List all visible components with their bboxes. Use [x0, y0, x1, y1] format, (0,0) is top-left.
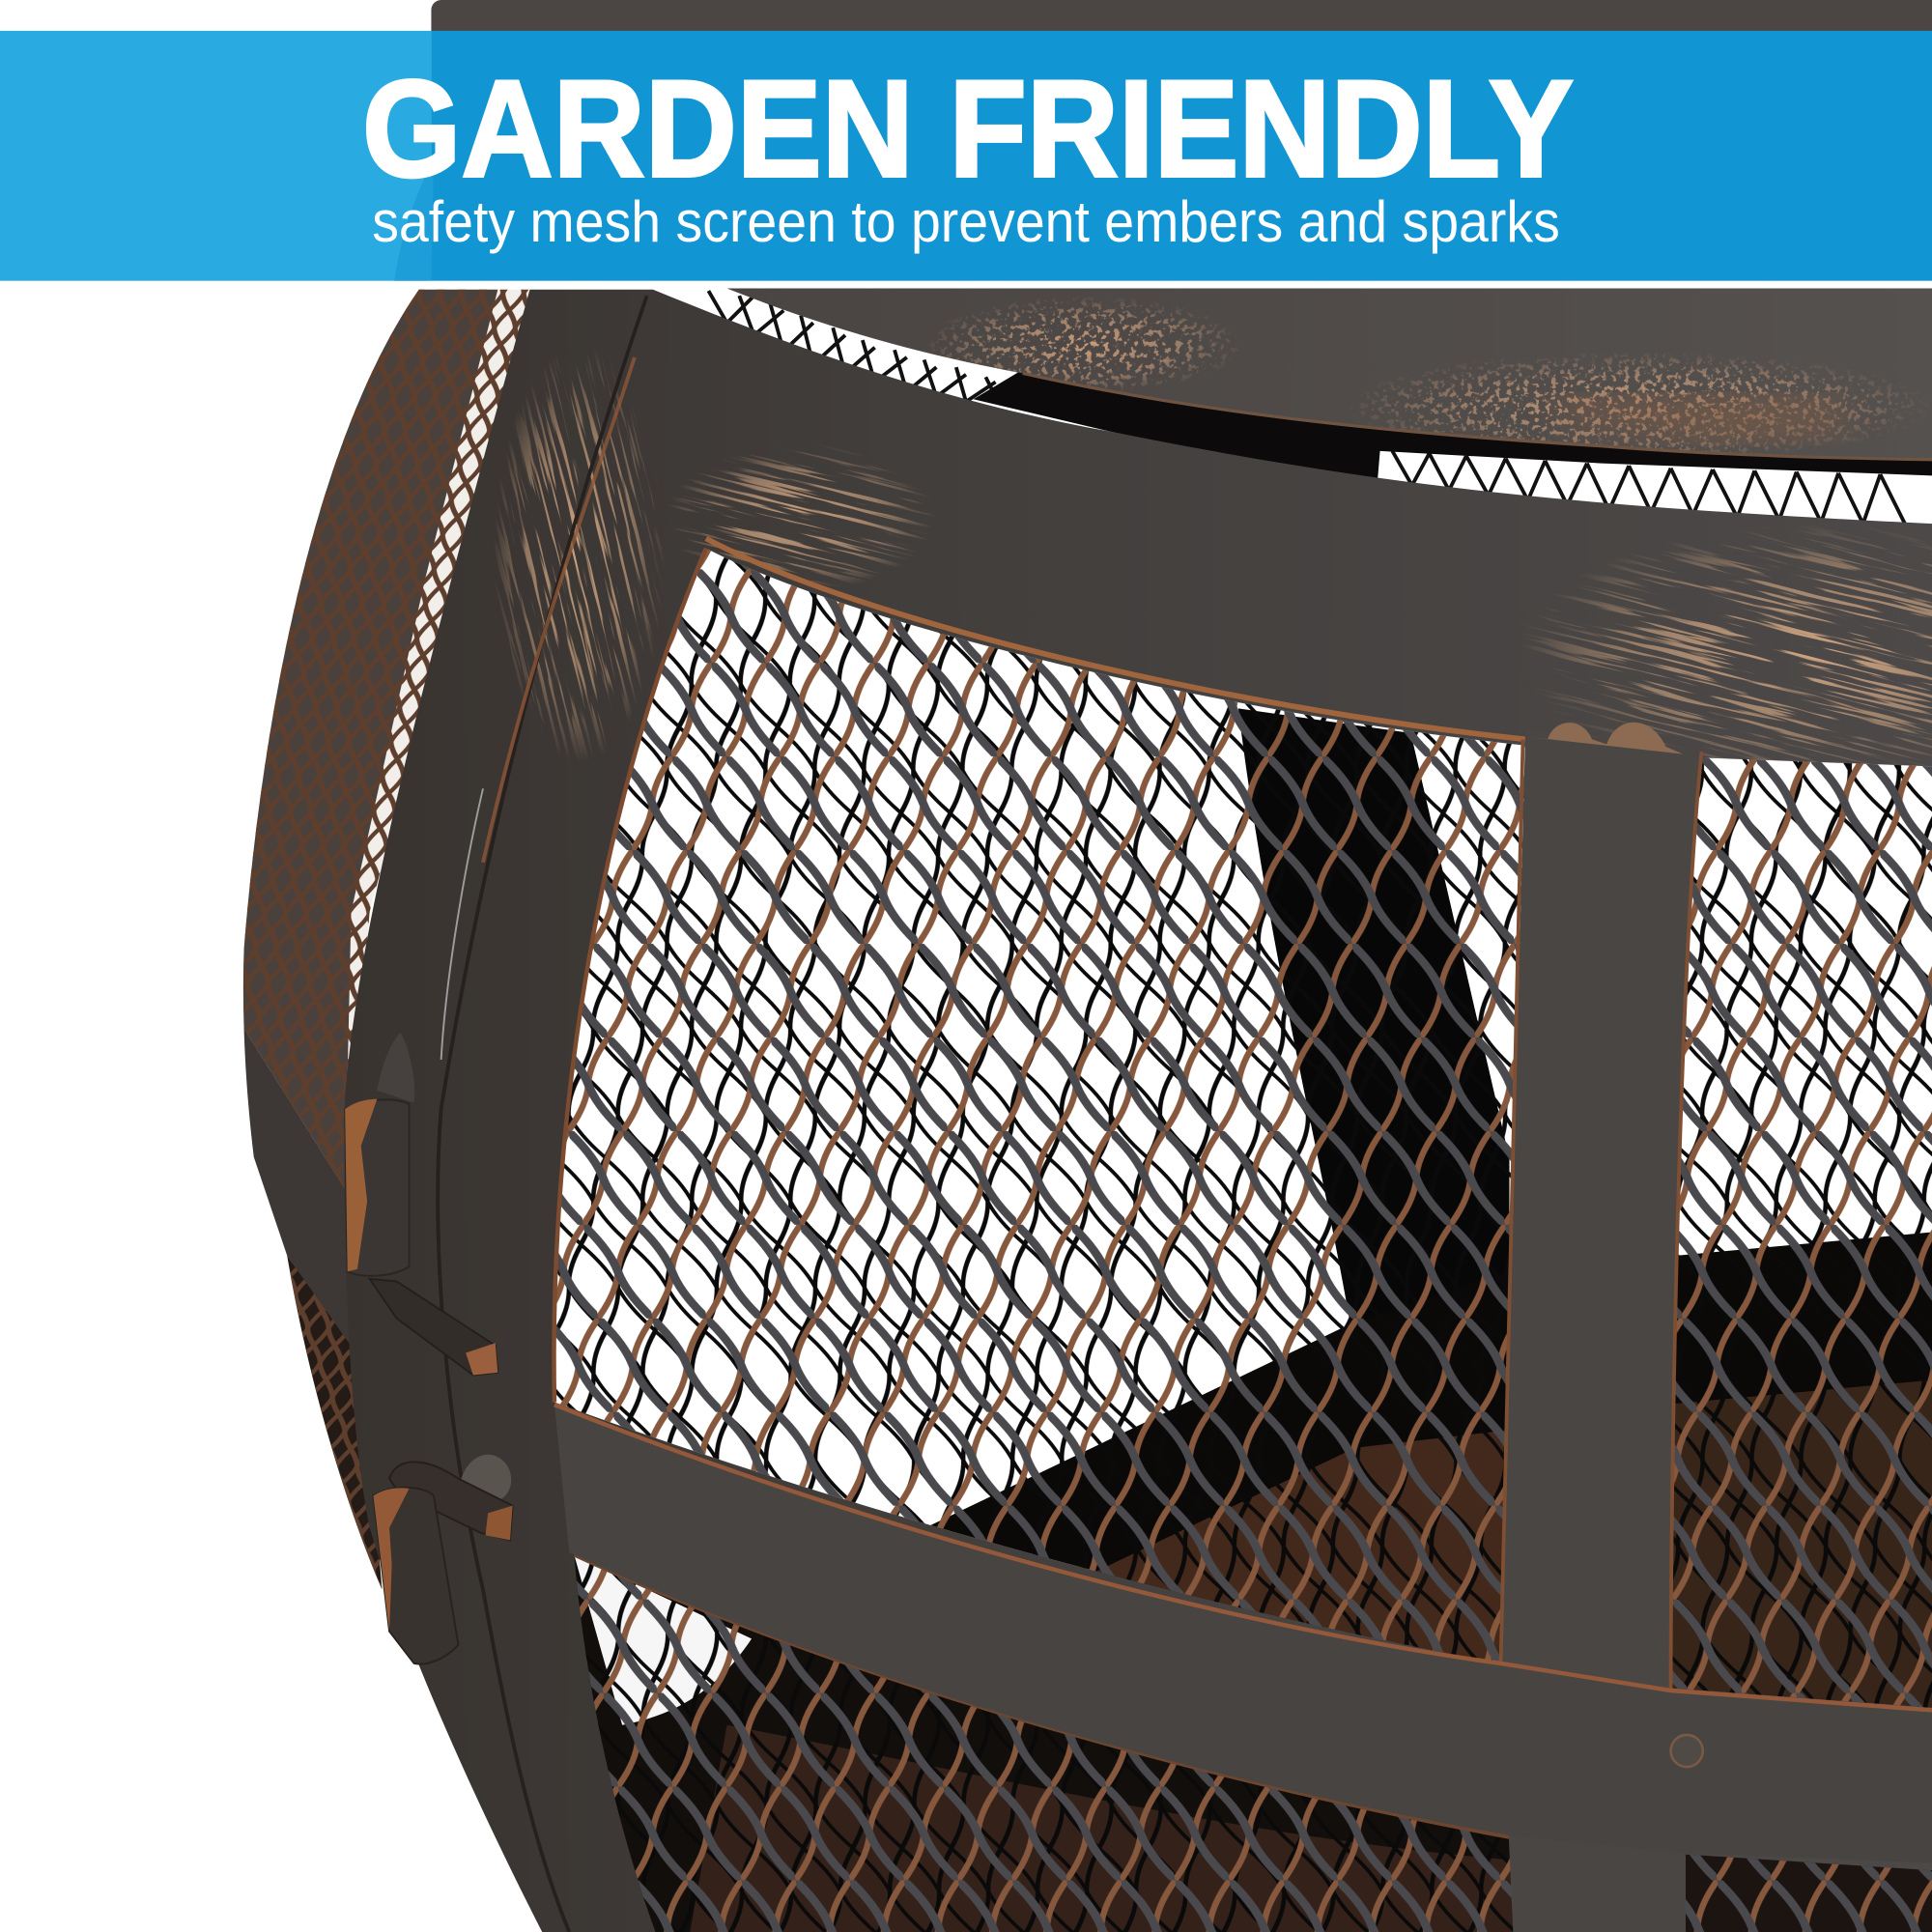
banner right segment [431, 31, 1932, 281]
main mesh panel [542, 538, 1540, 1676]
interior black post [1238, 708, 1509, 1355]
post copper edges [1501, 739, 1701, 1694]
title: GARDEN FRIENDLY [362, 52, 1574, 206]
frame copper wear stripe [483, 357, 635, 863]
lower horizontal band [554, 1405, 1932, 1863]
interior floor [930, 1326, 1507, 1654]
subtitle: safety mesh screen to prevent embers and sparks [372, 189, 1560, 254]
lower hinge barrel [373, 1488, 458, 1664]
upper hinge [345, 1033, 497, 1375]
mesh front layer [542, 542, 1540, 1676]
rear white mesh gap under lid, right [1378, 451, 1932, 524]
upper hinge pin tip [466, 1343, 497, 1375]
band copper top edge [554, 1405, 1932, 1710]
right panel front mesh [1663, 752, 1932, 1713]
post notches [1528, 723, 1683, 754]
banner left segment [0, 31, 431, 281]
frame vertical seam [438, 296, 647, 1932]
lower hinge copper wear [373, 1488, 409, 1632]
lid copper patina [931, 298, 1919, 454]
light gap along door seam [441, 788, 483, 1060]
lower hinge bump [458, 1455, 511, 1501]
bottom panel copper edge [574, 1555, 1516, 1838]
frame copper patina, left [497, 357, 662, 755]
lower right mesh panel [1686, 1855, 1932, 1932]
lower rear mesh [287, 1256, 382, 1589]
panel left copper edge [554, 549, 706, 1403]
upper hinge copper wear [345, 1099, 377, 1271]
rear horizontal band [243, 949, 365, 1365]
right mesh panel [1663, 752, 1932, 1713]
banner lower rule [0, 281, 1932, 288]
lid worn copper patch [1552, 397, 1848, 441]
bottom panel white opening [574, 1555, 752, 1725]
rear white mesh gap under lid, left [696, 288, 1023, 402]
lid rim [1023, 373, 1932, 460]
lid top above banner [431, 0, 1932, 49]
bottom mesh panel [567, 1547, 1528, 1932]
black shadow wedge under lid [974, 370, 1932, 480]
panel copper edge [706, 538, 1525, 739]
banner mesh tint [394, 160, 434, 281]
lid [690, 288, 1932, 473]
frame copper patina, collar [672, 448, 1932, 766]
lower hinge pin [389, 1462, 513, 1540]
fire pit metal frame [344, 290, 1932, 1932]
upper hinge barrel [345, 1099, 409, 1276]
upper hinge pin [370, 1279, 497, 1375]
right panel back mesh [1663, 752, 1932, 1713]
bottom panel interior copper [690, 1725, 1516, 1932]
upper hinge knob [377, 1033, 414, 1103]
vertical post [1501, 723, 1701, 1932]
blue banner [0, 31, 1932, 288]
mesh back layer [542, 542, 1540, 1676]
rear left mesh [244, 290, 529, 1189]
rivet [1671, 1735, 1703, 1767]
right panel interior dark [1663, 1233, 1932, 1713]
lower hinge [373, 1455, 513, 1664]
